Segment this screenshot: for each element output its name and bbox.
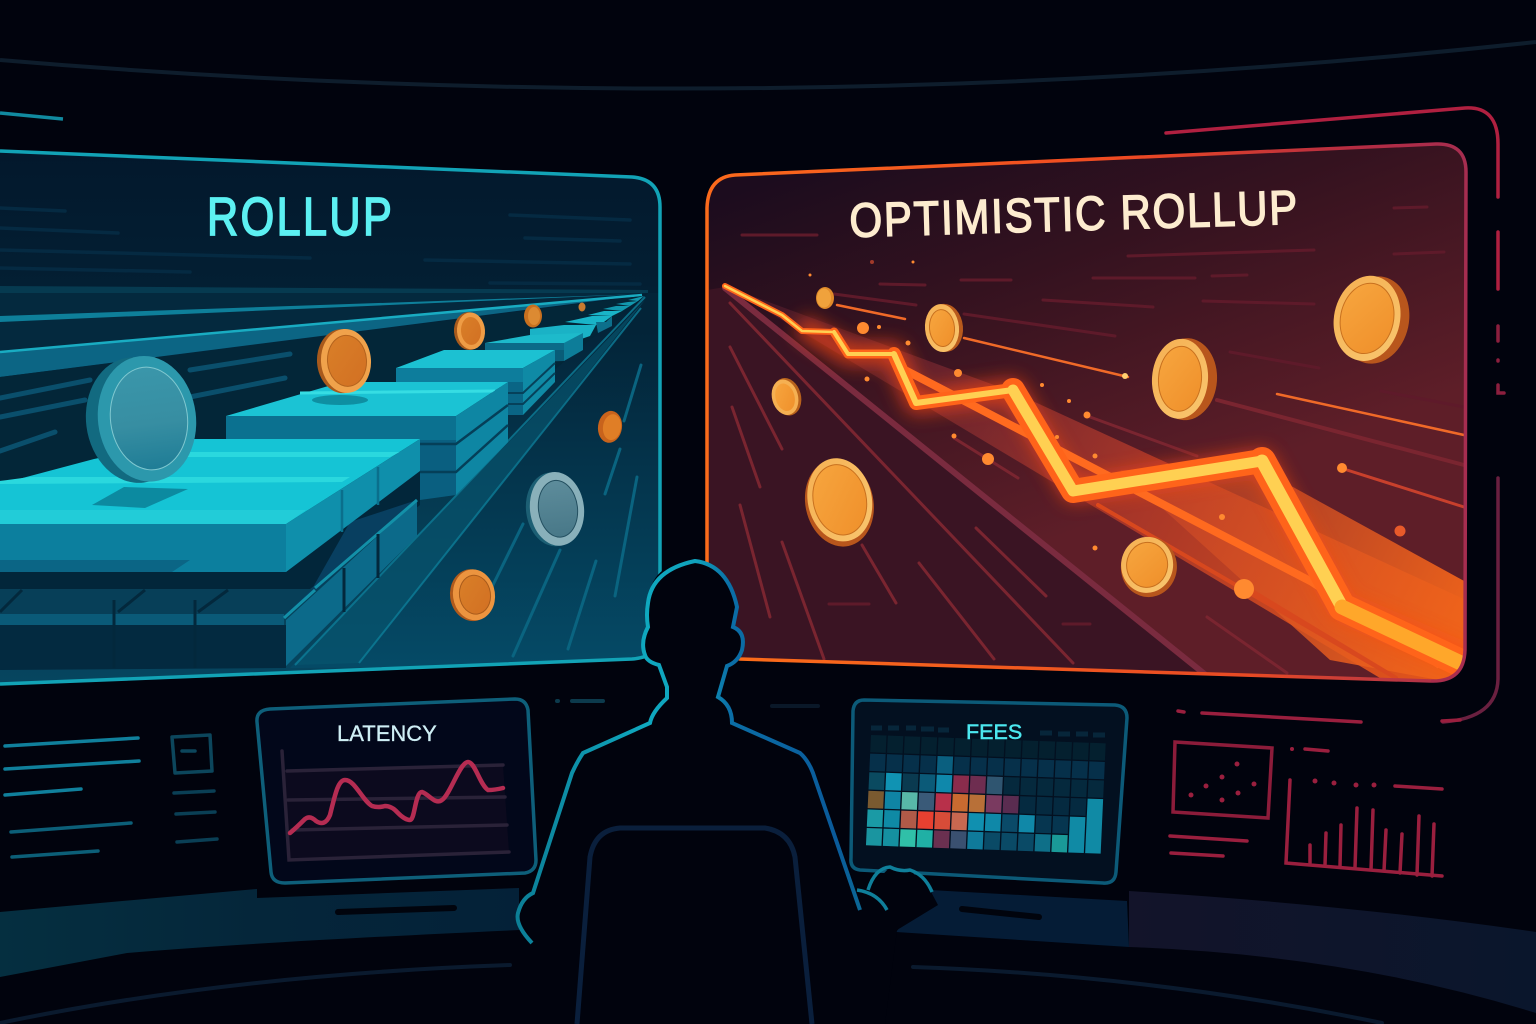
coin: left: [772, 378, 802, 416]
coin: grey: [526, 472, 584, 546]
trend line outer glow: [800, 325, 1470, 662]
latency line: [290, 762, 503, 833]
dashes between monitors: [557, 699, 603, 703]
heatmap header ticks: [871, 728, 1105, 735]
body outline: [518, 561, 860, 943]
coin: large teal: [86, 356, 196, 483]
fees heatmap panel: [851, 700, 1127, 883]
trend line core: [725, 286, 1480, 672]
hand on desk: [857, 867, 932, 910]
coin: orange 3: [524, 304, 542, 328]
near step: [0, 395, 420, 572]
far tiny steps: [530, 296, 644, 345]
left console widgets: [5, 735, 217, 857]
title: optimistic rollup: OPTIMISTIC ROLLUP: [849, 180, 1300, 248]
streaks: [725, 207, 1464, 680]
panel: rollup screen: [0, 151, 665, 684]
coin: lower center: [1120, 536, 1177, 598]
second step: [226, 382, 508, 500]
heatmap grid: [866, 735, 1106, 854]
desk left: [0, 888, 519, 977]
bar chart: [1286, 780, 1442, 876]
latency label: LATENCY: [337, 721, 437, 746]
coin: small top: [816, 287, 834, 309]
third step: [396, 350, 555, 415]
shadow under near step: [0, 484, 420, 589]
lower tier blocks: [0, 500, 417, 670]
person silhouette: [518, 561, 938, 1024]
scatter frame: [1173, 742, 1272, 818]
title: rollup: ROLLUP: [207, 188, 394, 247]
chart area tint: [285, 765, 509, 860]
right outer bracket: [1166, 108, 1504, 722]
coin: center top: [924, 304, 963, 352]
coin: center: [1152, 338, 1218, 420]
latency chart panel: [257, 699, 536, 883]
body fill: [518, 561, 938, 1024]
coin: orange 6: [450, 569, 496, 622]
coin: orange 4: [578, 302, 586, 312]
chair back: [577, 828, 812, 1024]
lower-left road: [707, 287, 1212, 680]
coin: lower left: [804, 458, 874, 547]
scatter dots: [1188, 747, 1376, 802]
coin: upper right: [1334, 276, 1410, 364]
coin: orange 2: [454, 312, 485, 350]
left outer accent: [0, 113, 63, 119]
coin: orange 5: [598, 410, 622, 443]
background streaks: [0, 208, 640, 284]
desk right: [896, 890, 1536, 1013]
coin: orange 1: [316, 329, 372, 394]
fees label: FEES: [966, 720, 1022, 744]
right console widgets: [1170, 711, 1460, 876]
desk slots and floor arcs: [0, 908, 1382, 1023]
fourth step: [485, 333, 583, 362]
floor: [290, 293, 665, 668]
sparks: [808, 260, 1406, 599]
reflected line: [905, 370, 1440, 665]
ceiling arc: [0, 42, 1536, 89]
panel: optimistic rollup screen: [707, 144, 1480, 685]
trend line halo: [725, 286, 1480, 672]
orange wedges: [750, 295, 1437, 680]
horizon bands: [0, 286, 648, 500]
chart axes: [282, 751, 509, 860]
